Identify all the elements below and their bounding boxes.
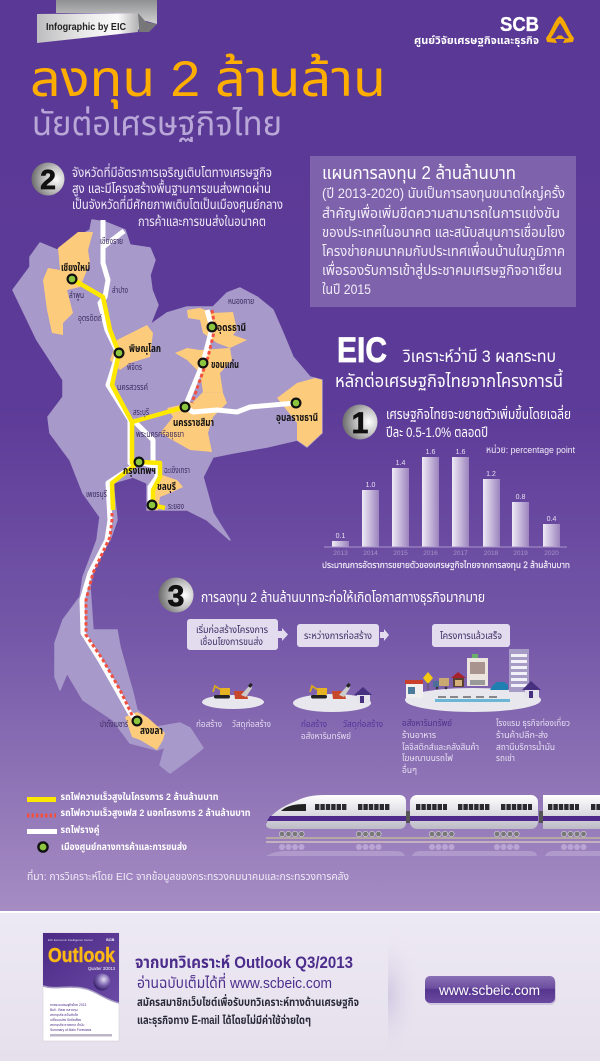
map of Thailand (13, 220, 322, 773)
stage 1 labels: วัสดุก่อสร้าง (232, 719, 271, 729)
bar chart: GDP growth: 2020 (544, 550, 559, 557)
bar chart: GDP growth: หน่วย: percentage point (486, 445, 575, 456)
province labels: ฉะเชิงเทรา (164, 465, 190, 475)
stage 3 box (432, 624, 510, 647)
point 3 badge (158, 578, 194, 613)
province labels: เชียงราย (100, 236, 123, 246)
province labels: อุตรดิตถ์ (78, 313, 102, 323)
legend: รถไฟความเร็วสูงเฟส 2 นอกโครงการ 2 ล้านล้านบาท (60, 808, 250, 819)
red dashed high-speed lines (86, 310, 215, 717)
SCB logo: ศูนย์วิจัยเศรษฐกิจและธุรกิจ (414, 35, 539, 47)
bar chart: GDP growth: 2019 (513, 550, 528, 557)
point 1 text: ปีละ 0.5-1.0% ตลอดปี (386, 424, 488, 440)
website button (425, 976, 556, 1005)
panel: investment plan: โครงข่ายคมนาคมกับประเทศเพื่อนบ้านในภูมิภาค (322, 241, 565, 260)
website button: www.scbeic.com (438, 982, 540, 998)
point 1 badge (342, 404, 378, 440)
bar chart: GDP growth: 2014 (363, 550, 378, 557)
province labels: ระยอง (168, 501, 184, 511)
EIC heading: หลักต่อเศรษฐกิจไทยจากโครงการนี้ (335, 368, 563, 391)
bar chart: GDP growth: 1.4 (396, 460, 405, 467)
stage 1 labels: ก่อสร้าง (196, 719, 222, 729)
stage 2 labels: อสังหาริมทรัพย์ (301, 731, 351, 741)
province labels: ขอนแก่น (211, 358, 239, 371)
stage 1 box: เริ่มก่อสร้างโครงการ (196, 624, 268, 636)
bar chart: GDP growth: 2013 (333, 550, 348, 557)
province labels: กรุงเทพฯ (123, 465, 156, 477)
stage 3 labels left: อื่นๆ (402, 763, 417, 775)
panel: investment plan: แผนการลงทุน 2 ล้านล้านบาท (322, 163, 516, 184)
stage 2 labels (301, 719, 383, 741)
report cover: Bull - Bear ตลาดทุน (50, 1008, 78, 1012)
header ribbon: Infographic by EIC (37, 0, 157, 43)
province labels: พิษณุโลก (129, 343, 161, 355)
report cover: สาขาธุรกิจ อะไรเติบโต (50, 1013, 78, 1017)
footer text: และธุรกิจทาง E-mail ได้โดยไม่มีค่าใช้จ่ายใดๆ (137, 1013, 311, 1027)
province labels: สงขลา (140, 725, 163, 737)
highlighted provinces (43, 232, 322, 750)
report cover: Outlook (48, 945, 116, 967)
bar chart: GDP growth: 2016 (423, 550, 438, 557)
bar chart: GDP growth: 0.4 (547, 516, 556, 523)
footer panel (0, 911, 600, 1061)
panel: investment plan: ในปี 2015 (322, 281, 371, 297)
bar chart: GDP growth: 2015 (393, 550, 408, 557)
EIC heading: วิเคราะห์ว่ามี 3 ผลกระทบ (403, 347, 556, 366)
legend: รถไฟความเร็วสูงในโครงการ 2 ล้านล้านบาท (60, 792, 218, 803)
stage 3 labels right: สถานีบริการน้ำมัน (496, 740, 555, 752)
stage 2 box (297, 624, 389, 647)
bar chart: GDP growth: 2018 (484, 550, 499, 557)
bar chart: GDP growth: 1.0 (366, 482, 375, 489)
point 1 text: เศรษฐกิจไทยจะขยายตัวเพิ่มขึ้นโดยเฉลี่ย (386, 404, 571, 422)
province labels (61, 236, 318, 737)
panel: investment plan (310, 156, 576, 307)
report cover: Quarter 3/2013 (88, 966, 115, 971)
legend (27, 792, 250, 853)
bar chart: GDP growth: 0.8 (516, 494, 525, 501)
stage 2 box: ระหว่างการก่อสร้าง (304, 631, 372, 642)
footer text: อ่านฉบับเต็มได้ที่ www.scbeic.com (137, 972, 332, 992)
bar chart: GDP growth: 1.6 (426, 449, 435, 456)
report cover: ภาพรวมเศรษฐกิจไทย 2013 (50, 1003, 87, 1007)
province labels: พระนครศรีอยุธยา (136, 429, 184, 439)
province labels: พิจิตร (127, 362, 142, 372)
province labels: อุบลราชธานี (276, 412, 318, 424)
province labels: อุดรธานี (217, 322, 246, 334)
point 2 text: สูง และมีโครงสร้างพื้นฐานการขนส่งพาดผ่าน (72, 179, 271, 197)
province labels: นครสวรรค์ (117, 382, 148, 392)
province labels: สระบุรี (133, 407, 149, 417)
EIC heading (335, 331, 563, 391)
legend: รถไฟรางคู่ (60, 824, 100, 836)
illustration: stage 1 construction (202, 683, 264, 709)
province labels: เชียงใหม่ (61, 261, 90, 274)
panel: investment plan: ของประเทศในอนาคต และสนับสนุนการเชื่อมโยง (322, 222, 565, 241)
stage 3 labels right: ร้านค้าปลีก-ส่ง (496, 730, 548, 740)
stage 1 labels (196, 719, 271, 729)
stage 3 box: โครงการแล้วเสร็จ (440, 631, 502, 642)
SCB logo (414, 14, 574, 47)
footer text (135, 953, 359, 1027)
point 2 text: จังหวัดที่มีอัตราการเจริญเติบโตทางเศรษฐกิจ (72, 163, 272, 180)
panel: investment plan: สำคัญเพื่อเพิ่มขีดความสามารถในการแข่งขัน (322, 203, 560, 221)
header ribbon: Infographic by EIC: Infographic by EIC (46, 22, 126, 33)
stage 3 labels left: ร้านอาหาร (402, 730, 437, 740)
report cover: เปลี่ยนแปลง ปัจจัยเสี่ยง (50, 1017, 81, 1022)
point 2 text (72, 163, 283, 229)
point 1 badge: 1 (352, 407, 368, 440)
panel: investment plan: (ปี 2013-2020) นับเป็นการลงทุนขนาดใหญ่ครั้ง (322, 184, 565, 202)
province labels: ลำพูน (69, 290, 84, 301)
EIC heading: EIC (337, 331, 387, 370)
province labels: ลำปาง (112, 285, 128, 295)
stage 3 labels right: รถเช่า (496, 753, 515, 763)
white double track lines (82, 220, 296, 720)
stage 3 labels right (496, 716, 570, 763)
bar chart: GDP growth: 2017 (453, 550, 468, 557)
bar chart: GDP growth (322, 445, 575, 570)
point 1 text (386, 404, 571, 440)
footer text: จากบทวิเคราะห์ Outlook Q3/2013 (135, 953, 353, 972)
country outline (13, 220, 322, 773)
SCB logo: SCB (500, 14, 539, 36)
province labels: หนองคาย (228, 296, 254, 306)
footer text: สมัครสมาชิกเว็บไซต์เพื่อรับบทวิเคราะห์ทางด้านเศรษฐกิจ (137, 994, 359, 1009)
point 2 badge: 2 (40, 164, 56, 195)
yellow high-speed lines (72, 279, 185, 510)
stage 3 labels left: โลจิสติกส์และคลังสินค้า (402, 742, 479, 752)
bar chart: GDP growth: 1.6 (456, 449, 465, 456)
province labels: ปาดังเบซาร์ (100, 719, 128, 729)
point 3 heading: การลงทุน 2 ล้านล้านบาทจะก่อให้เกิดโอกาสทางธุรกิจมากมาย (201, 589, 485, 606)
stage 1 box (187, 619, 288, 650)
stage 3 labels left: โฆษณาบนรถไฟ (402, 753, 453, 763)
report cover (43, 933, 119, 1041)
bar chart: GDP growth: 0.1 (336, 533, 345, 540)
point 2 text: เป็นจังหวัดที่มีศักยภาพเติบโตเป็นเมืองศูนย์กลาง (72, 195, 283, 213)
report cover: EIC Economic Intelligence Center (48, 938, 93, 942)
stage 1 box: เชื่อมโยงการขนส่ง (200, 635, 263, 648)
title: ลงทุน 2 ล้านล้าน (30, 51, 386, 109)
bar chart: GDP growth: ประมาณการอัตราการขยายตัวของเศรษฐกิจไทยจากการลงทุน 2 ล้านล้านบาท (322, 560, 570, 570)
province labels: นครราชสีมา (173, 417, 214, 429)
illustration: stage 3 completed city (405, 649, 541, 712)
source note: ที่มา: การวิเคราะห์โดย EIC จากข้อมูลของกระทรวงคมนาคมและกระทรวงการคลัง (27, 869, 349, 883)
point 2 text: การค้าและการขนส่งในอนาคต (138, 213, 266, 229)
stage 3 labels left: อสังหาริมทรัพย์ (402, 718, 452, 728)
stage 3 labels left (402, 718, 479, 775)
subtitle: นัยต่อเศรษฐกิจไทย (32, 105, 282, 143)
stage 2 labels: วัสดุก่อสร้าง (343, 719, 383, 729)
train illustration (266, 795, 600, 856)
stage 3 labels right: โรงแรม ธุรกิจท่องเที่ยว (496, 716, 570, 728)
panel: investment plan: เพื่อรองรับการเข้าสู่ประชาคมเศรษฐกิจอาเซียน (322, 260, 562, 279)
stage 2 labels: ก่อสร้าง (301, 719, 327, 729)
illustration: stage 2 construction (293, 683, 372, 712)
point 2 badge (32, 162, 64, 196)
bar chart: GDP growth: 1.2 (486, 471, 496, 478)
province labels: เพชรบุรี (86, 489, 107, 499)
report cover: SCB (106, 937, 115, 942)
point 3 badge: 3 (168, 580, 184, 613)
province labels: ชลบุรี (157, 481, 176, 493)
report cover: สาขาธุรกิจ ยางพารา น้ำมัน (50, 1022, 84, 1027)
city nodes (68, 275, 300, 725)
legend: เมืองศูนย์กลางการค้าและการขนส่ง (61, 841, 188, 853)
report cover: Summary of Main Forecasts (50, 1028, 92, 1032)
